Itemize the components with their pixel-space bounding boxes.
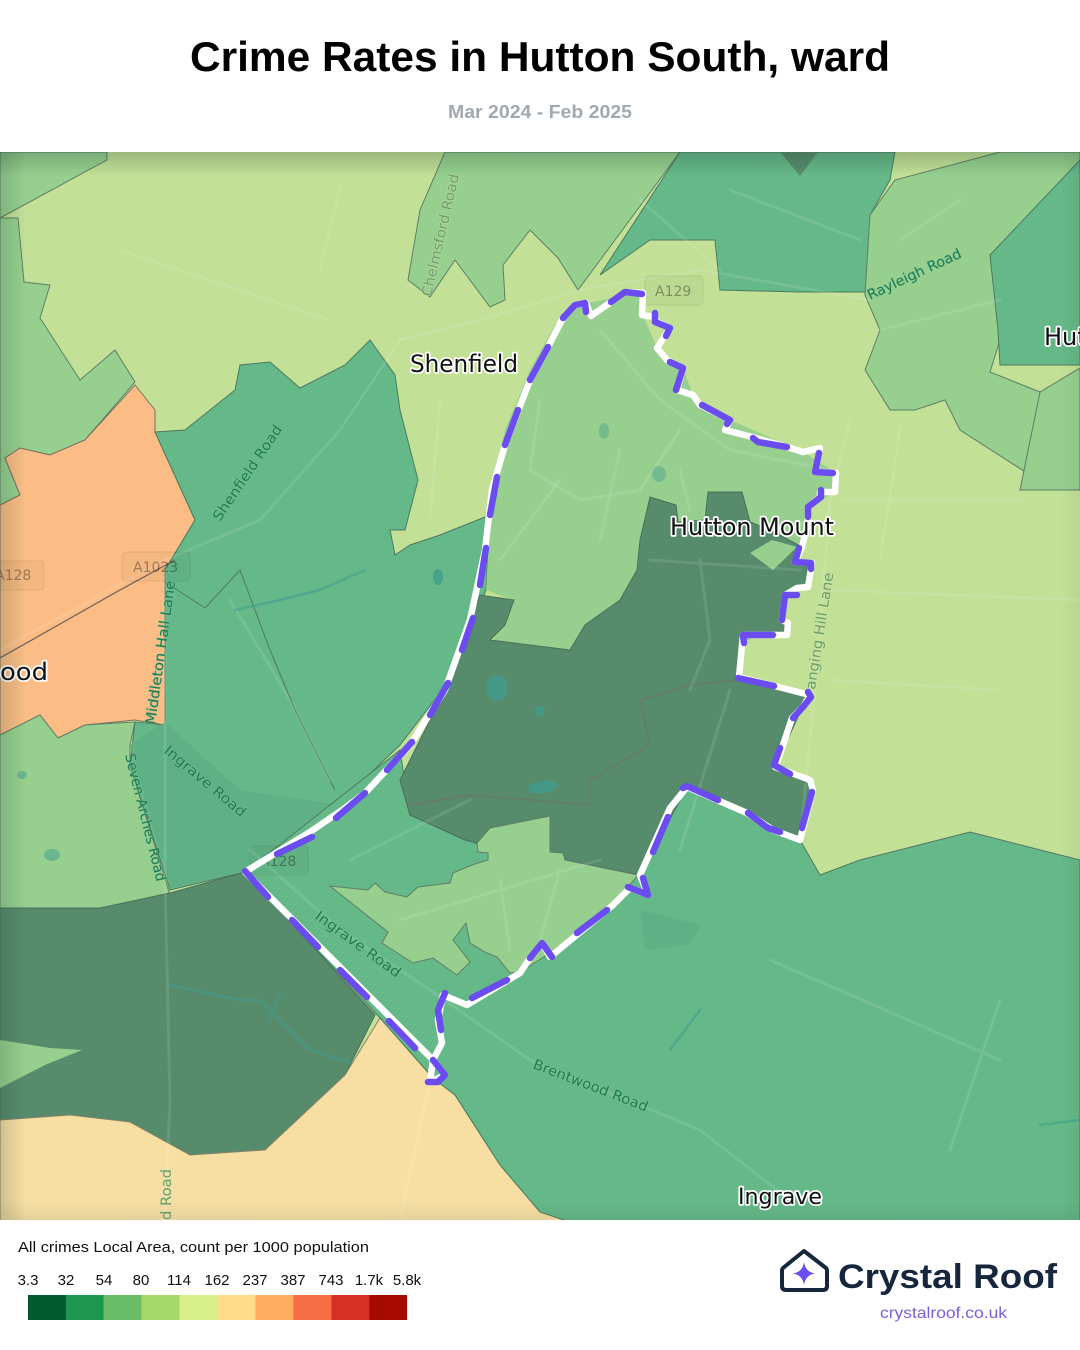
road label Shenfield Road: Shenfield Road xyxy=(210,422,286,524)
area: ward south mid-green xyxy=(330,816,638,975)
legend tick labels: 162 xyxy=(204,1272,230,1289)
roads and streets xyxy=(0,190,1080,1220)
area: east green xyxy=(990,160,1080,365)
choropleth map xyxy=(0,152,1080,1222)
area: Shenfield Road green xyxy=(130,340,490,890)
map edge vignette xyxy=(0,152,1080,1220)
ward boundary white line xyxy=(245,292,836,1082)
logo url: crystalroof.co.uk xyxy=(880,1305,1008,1322)
road label Hanging Hill Lane: anging Hill Lane xyxy=(803,572,837,691)
place label Hutton Mount: Hutton Mount xyxy=(670,513,834,541)
road label partial Road: d Road xyxy=(159,1169,175,1220)
legend tick labels: 80 xyxy=(133,1272,149,1289)
road label Brentwood Road: Brentwood Road xyxy=(531,1057,650,1115)
area: ward north mid-green xyxy=(486,293,836,655)
ponds xyxy=(17,423,666,861)
A-road line through orange district xyxy=(0,560,175,658)
legend tick labels: 114 xyxy=(167,1272,191,1289)
legend tick labels: 1.7k xyxy=(355,1272,384,1289)
title: Crime Rates in Hutton South, ward xyxy=(190,33,890,80)
icon: house with star xyxy=(782,1251,827,1290)
logo: Crystal Roof xyxy=(782,1251,1058,1322)
legend tick labels: 5.8k xyxy=(393,1272,422,1289)
area: south-east fields, slightly darker xyxy=(640,910,700,950)
area: west mid-green xyxy=(0,218,135,505)
area: ward mid-green notch near Hutton Mount xyxy=(750,540,797,570)
area: east edge mid-green xyxy=(1020,368,1080,490)
road shield A128 south xyxy=(250,846,308,875)
place label Brentwood, cut off: ood xyxy=(0,658,48,686)
legend tick labels: 54 xyxy=(96,1272,112,1289)
ward boundary purple dashes xyxy=(245,292,833,1082)
legend title: All crimes Local Area, count per 1000 population xyxy=(18,1239,369,1256)
area: north dark patch xyxy=(780,152,818,176)
area: southern tan xyxy=(0,1018,570,1222)
area: top centre mid-green xyxy=(408,152,680,307)
road shield A1023 xyxy=(122,552,190,581)
area: darker strip west of Ingrave Road xyxy=(130,722,242,876)
legend xyxy=(18,1239,422,1320)
legend tick labels: 32 xyxy=(58,1272,74,1289)
area: south-west dark woodland xyxy=(0,872,375,1155)
legend tick labels xyxy=(18,1272,422,1289)
road shield A1023: A1023 xyxy=(133,560,178,576)
area: orange high-crime district xyxy=(0,385,195,738)
road label Rayleigh Road: Rayleigh Road xyxy=(865,246,964,304)
place label Shenfield: Shenfield xyxy=(410,350,518,378)
legend colour scale xyxy=(28,1295,407,1320)
legend tick labels: 3.3 xyxy=(18,1272,38,1289)
road shield A129 xyxy=(645,276,703,305)
area: small mid-green patch xyxy=(0,1040,82,1088)
area: north-east mid-green xyxy=(865,152,1080,475)
logo wordmark: Crystal Roof xyxy=(838,1258,1058,1296)
area: south-east green xyxy=(245,750,1080,1222)
legend tick labels: 237 xyxy=(242,1272,268,1289)
road label Seven Arches Road: Seven Arches Road xyxy=(121,752,168,883)
road shield A128 south: A128 xyxy=(260,854,296,870)
woodland paths xyxy=(410,680,735,805)
map base: lime areas xyxy=(2,152,1080,1066)
road label Ingrave Road upper: Ingrave Road xyxy=(160,743,249,821)
area: north green xyxy=(600,152,895,292)
legend tick labels: 387 xyxy=(280,1272,306,1289)
area: top-left mid-green xyxy=(0,152,107,218)
legend tick labels: 743 xyxy=(318,1272,344,1289)
area: ward central dark xyxy=(400,492,812,875)
subtitle: date range: Mar 2024 - Feb 2025 xyxy=(448,102,632,122)
waterways xyxy=(170,570,1080,1125)
road label Middleton Hall Lane: Middleton Hall Lane xyxy=(143,580,179,726)
road label Ingrave Road lower: Ingrave Road xyxy=(312,908,404,981)
place label Ingrave: Ingrave xyxy=(738,1185,822,1210)
road shield A129: A129 xyxy=(655,284,691,300)
road label Chelmsford Road: Chelmsford Road xyxy=(419,173,463,298)
boundary line between green districts xyxy=(165,570,335,790)
road shield A128 west xyxy=(0,561,44,590)
area: south-west mid-green xyxy=(0,715,170,908)
